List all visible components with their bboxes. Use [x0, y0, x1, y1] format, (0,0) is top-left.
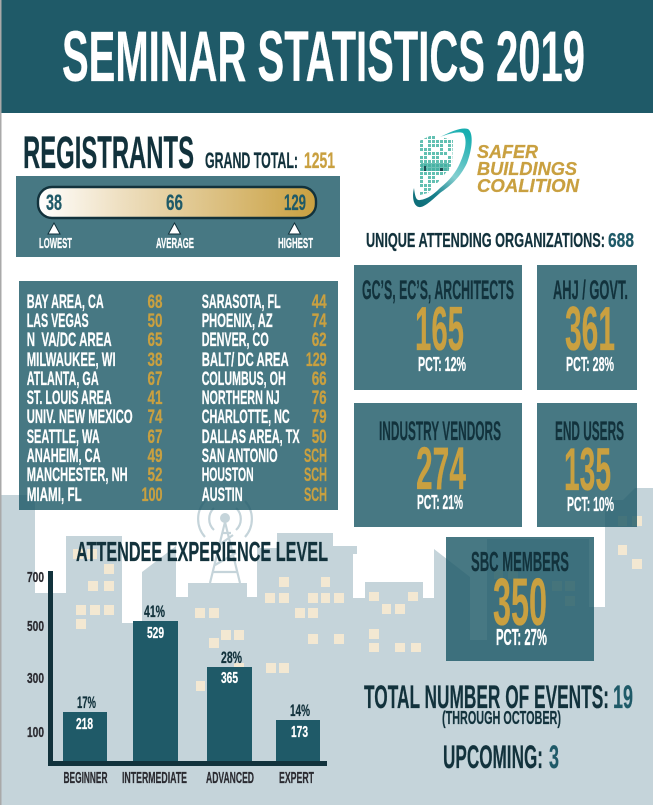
list: right column counts: 62: [312, 329, 327, 351]
list: right column counts: SCH: [304, 484, 327, 506]
axes: [48, 571, 327, 766]
y axis labels: 300: [27, 670, 44, 687]
gauge labels: [39, 236, 313, 252]
header band: [0, 0, 653, 113]
events note: (THROUGH OCTOBER): [442, 708, 561, 728]
logo: Safer Buildings Coalition: BUILDINGS: [477, 159, 577, 179]
panel: GC's, EC's, Architects: [354, 265, 522, 390]
list: right column cities: NORTHERN NJ: [202, 387, 280, 409]
total number of events: 19: [613, 679, 633, 715]
city skyline background: [0, 488, 653, 805]
list: left column counts: 68: [148, 291, 163, 313]
list: right column counts: 74: [312, 310, 327, 332]
list: right column cities: BALT/ DC AREA: [202, 349, 289, 371]
gauge values: 38: [46, 190, 62, 215]
panel: registrants by city: [19, 281, 338, 510]
list: left column cities: ANAHEIM, CA: [27, 445, 101, 467]
bars: [63, 621, 320, 762]
upcoming events: UPCOMING:: [443, 739, 543, 775]
list: left column cities: MIAMI, FL: [27, 484, 82, 506]
list: right column cities: COLUMBUS, OH: [202, 368, 286, 390]
list: left column counts: [142, 291, 163, 506]
y axis labels: 700: [27, 569, 44, 586]
category labels: BEGINNER: [64, 770, 108, 787]
y axis labels: 100: [27, 724, 44, 741]
list: left column counts: 67: [148, 426, 162, 448]
panel: End Users: [537, 403, 637, 527]
gauge bar: [38, 187, 316, 218]
percent labels: 41%: [144, 603, 165, 621]
panel: GC's, EC's, Architects: 165: [415, 295, 464, 364]
panel: Industry Vendors: INDUSTRY VENDORS: [379, 416, 501, 446]
list: left column counts: 100: [142, 484, 163, 506]
list: right column counts: 50: [312, 426, 327, 448]
list: left column cities: [27, 291, 133, 506]
value labels: 173: [291, 724, 308, 741]
list: right column counts: 44: [312, 291, 327, 313]
list: left column counts: 67: [148, 368, 162, 390]
y axis labels: 500: [27, 618, 44, 635]
heading: registrants: REGISTRANTS: [23, 127, 194, 178]
panel: Industry Vendors: PCT: 21%: [417, 492, 463, 514]
gauge markers: [48, 223, 300, 234]
gauge labels: HIGHEST: [278, 236, 313, 252]
list: right column cities: DENVER, CO: [202, 329, 269, 351]
list: left column cities: SEATTLE, WA: [27, 426, 100, 448]
list: right column counts: 66: [312, 368, 327, 390]
list: left column counts: 74: [148, 406, 163, 428]
list: left column cities: N VA/DC AREA: [27, 329, 112, 351]
percent labels: [77, 603, 310, 720]
gauge labels: AVERAGE: [156, 236, 194, 252]
percent labels: 17%: [77, 694, 96, 712]
list: right column counts: SCH: [304, 464, 327, 486]
list: left column cities: BAY AREA, CA: [27, 291, 104, 313]
list: left column counts: 49: [148, 445, 163, 467]
gauge labels: LOWEST: [39, 236, 72, 252]
list: left column cities: MILWAUKEE, WI: [27, 349, 116, 371]
grand total: GRAND TOTAL:: [205, 148, 298, 173]
list: left column cities: ST. LOUIS AREA: [27, 387, 112, 409]
list: left column cities: LAS VEGAS: [27, 310, 89, 332]
category labels: INTERMEDIATE: [122, 770, 187, 787]
bar chart: attendee experience level: [27, 569, 327, 787]
grand total: 1251: [304, 148, 335, 173]
panel: SBC Members: PCT: 27%: [496, 624, 547, 650]
category labels: EXPERT: [279, 770, 314, 787]
panel: GC's, EC's, Architects: PCT: 12%: [418, 354, 466, 376]
list: left column counts: 50: [148, 310, 163, 332]
panel: SBC Members: 350: [493, 565, 547, 640]
left page edge: [0, 0, 2, 805]
y axis labels: [27, 569, 44, 741]
panel: Industry Vendors: [354, 403, 522, 527]
gauge values: 129: [284, 190, 306, 215]
gauge values: 66: [166, 190, 183, 215]
list: left column counts: 41: [148, 387, 163, 409]
panel: Industry Vendors: 274: [416, 435, 466, 502]
list: right column cities: AUSTIN: [202, 484, 243, 506]
unique attending organizations: 688: [608, 230, 634, 252]
list: right column cities: CHARLOTTE, NC: [202, 406, 290, 428]
list: left column counts: 52: [148, 464, 163, 486]
list: right column counts: [304, 291, 327, 506]
logo: Safer Buildings Coalition: SAFER: [477, 142, 538, 162]
list: right column cities: HOUSTON: [202, 464, 254, 486]
gauge values: [46, 190, 306, 215]
value labels: 529: [147, 625, 164, 642]
list: right column cities: [202, 291, 300, 506]
upcoming events: [443, 739, 559, 775]
value labels: [76, 625, 308, 741]
list: left column counts: 38: [148, 349, 163, 371]
chart heading: ATTENDEE EXPERIENCE LEVEL: [76, 536, 328, 567]
logo: Safer Buildings Coalition: [413, 128, 580, 207]
panel: registrant range gauge: [16, 176, 340, 257]
upcoming events: 3: [549, 739, 559, 775]
icon: radio tower: [198, 501, 252, 583]
list: right column counts: SCH: [304, 445, 327, 467]
value labels: 218: [76, 716, 93, 733]
category labels: [64, 770, 314, 787]
list: left column cities: UNIV. NEW MEXICO: [27, 406, 133, 428]
list: right column counts: 76: [312, 387, 327, 409]
percent labels: 28%: [221, 649, 242, 667]
percent labels: 14%: [290, 702, 310, 720]
panel: AHJ / Govt.: [537, 265, 637, 390]
list: right column cities: SARASOTA, FL: [202, 291, 281, 313]
list: right column cities: DALLAS AREA, TX: [202, 426, 300, 448]
value labels: 365: [221, 670, 238, 687]
panel: SBC Members: [446, 537, 594, 661]
list: right column cities: SAN ANTONIO: [202, 445, 278, 467]
category labels: ADVANCED: [206, 770, 254, 787]
list: right column counts: 129: [306, 349, 327, 371]
list: right column counts: 79: [312, 406, 327, 428]
list: right column cities: PHOENIX, AZ: [202, 310, 273, 332]
list: left column counts: 65: [148, 329, 163, 351]
list: left column cities: ATLANTA, GA: [27, 368, 99, 390]
list: left column cities: MANCHESTER, NH: [27, 464, 128, 486]
logo: Safer Buildings Coalition: COALITION: [477, 176, 580, 196]
